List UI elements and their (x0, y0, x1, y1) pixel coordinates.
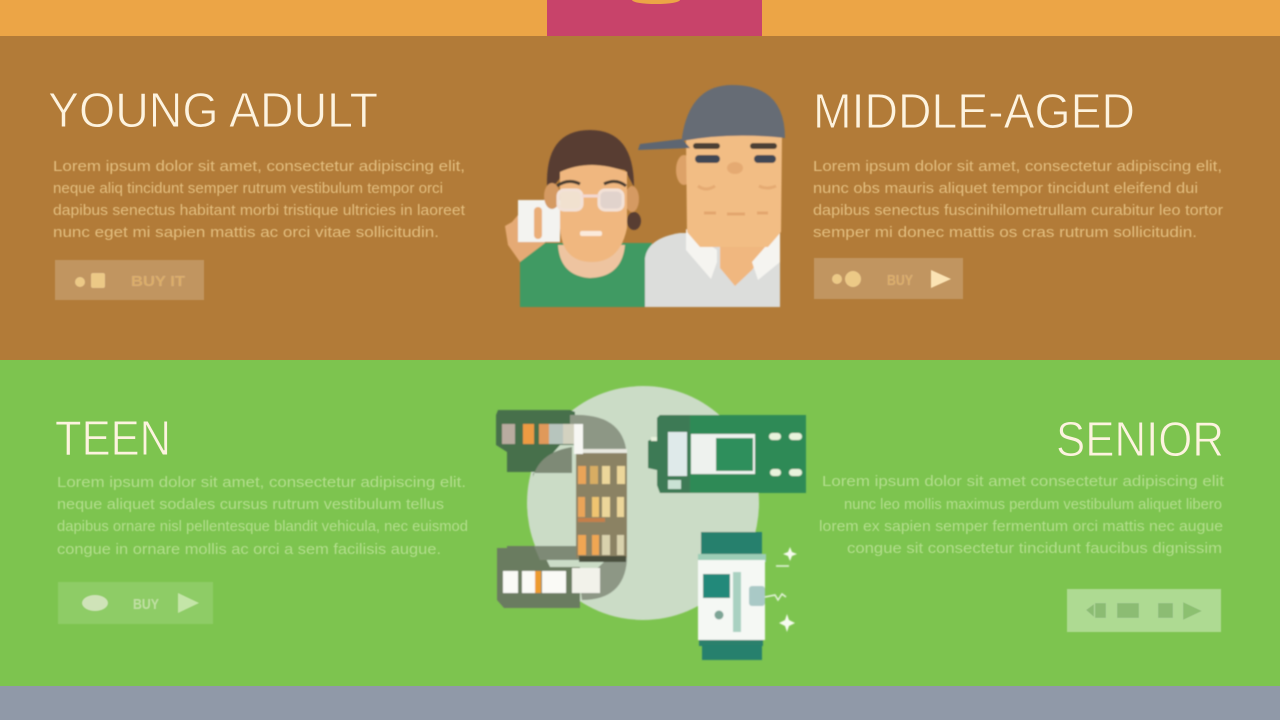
button: teen (58, 582, 213, 624)
button: senior (1067, 589, 1221, 632)
text block: teen (57, 474, 468, 558)
text block: middle-aged: nunc obs mauris aliquet tempor tincidunt eleifend dui (813, 180, 1198, 197)
heading: middle-aged: MIDDLE-AGED (813, 85, 1135, 139)
text block: teen: neque aliquet sodales cursus rutrum vestibulum tellus (57, 496, 444, 513)
heading: senior: SENIOR (1056, 413, 1224, 467)
panel: senior (819, 413, 1225, 632)
text block: teen: dapibus ornare nisl pellentesque blandit vehicula, nec euismod (57, 518, 468, 535)
device: horizontal card (648, 415, 806, 493)
text block: senior: lorem ex sapien semper fermentum orci mattis nec augue (819, 518, 1223, 535)
text block: middle-aged (813, 158, 1223, 241)
text block: senior (819, 473, 1225, 557)
illustration: devices (496, 386, 806, 660)
text block: middle-aged: dapibus senectus fuscinihilometrullam curabitur leo tortor (813, 202, 1223, 219)
person: young adult with glasses (505, 130, 652, 307)
top banner (0, 0, 1280, 36)
heading: young adult: YOUNG ADULT (48, 84, 378, 138)
text block: middle-aged: Lorem ipsum dolor sit amet, consectetur adipiscing elit, (813, 158, 1222, 175)
button: teen: BUY (133, 596, 159, 613)
button: young adult: BUY IT (131, 273, 185, 290)
text block: senior: congue sit consectetur tincidunt faucibus dignissim (847, 540, 1222, 557)
text block: teen: Lorem ipsum dolor sit amet, consectetur adipiscing elit. (57, 474, 466, 491)
device: folded phone (496, 410, 627, 608)
device: vertical unit (698, 532, 797, 660)
text block: senior: nunc leo mollis maximus perdum vestibulum aliquet libero (844, 496, 1222, 513)
panel: teen (55, 412, 468, 624)
text block: middle-aged: semper mi donec mattis os cras rutrum sollicitudin. (813, 224, 1197, 241)
text block: teen: congue in ornare mollis ac orci a sem facilisis augue. (57, 541, 441, 558)
button: middle-aged (814, 258, 963, 299)
text block: young adult: Lorem ipsum dolor sit amet, consectetur adipiscing elit, (53, 158, 465, 175)
panel: middle-aged (813, 85, 1223, 299)
panel: brown band (0, 36, 1280, 360)
person: middle-aged man with cap (638, 85, 785, 307)
bottom grey band (0, 686, 1280, 720)
background circle (527, 386, 759, 620)
text block: young adult: neque aliq tincidunt semper rutrum vestibulum tempor orci (53, 180, 443, 197)
text block: young adult: nunc eget mi sapien mattis ac orci vitae sollicitudin. (53, 224, 439, 241)
panel: young adult (48, 84, 466, 300)
button: young adult (55, 260, 204, 300)
panel: green band (0, 360, 1280, 686)
text block: young adult: dapibus senectus habitant morbi tristique ultricies in laoreet (53, 202, 466, 219)
text block: senior: Lorem ipsum dolor sit amet consectetur adipiscing elit (822, 473, 1225, 490)
heading: teen: TEEN (55, 412, 171, 466)
text block: young adult (53, 158, 466, 241)
illustration: two people (505, 85, 785, 307)
button: middle-aged: BUY (887, 272, 913, 289)
